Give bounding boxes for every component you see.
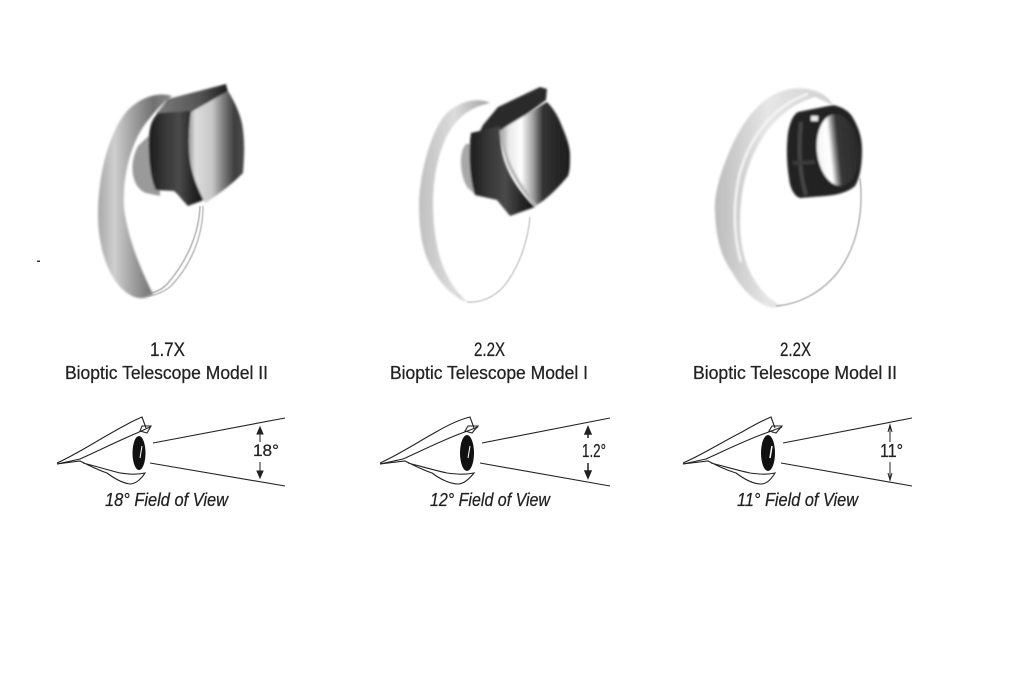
eye diagram: 11 degree field of view: 11° [880, 441, 903, 461]
telescope 3: 2.2X Model II illustration [715, 88, 863, 308]
caption: 1.7X Model II: 1.7X [150, 340, 185, 361]
eye diagram: 12 degree field of view [380, 417, 610, 510]
caption: 2.2X Model I: Bioptic Telescope Model I [390, 363, 588, 383]
stray dot mark [37, 260, 40, 262]
caption: 2.2X Model I: 2.2X [474, 340, 505, 361]
eye diagram: 12 degree field of view: 1.2° [582, 441, 606, 461]
eye diagram: 11 degree field of view [683, 417, 912, 510]
caption: 2.2X Model II [693, 340, 897, 383]
eye diagram: 18 degree field of view [57, 417, 285, 510]
eye diagram: 12 degree field of view: 12° Field of View [430, 490, 551, 510]
caption: 2.2X Model II: 2.2X [780, 340, 811, 361]
eye diagram: 18 degree field of view: 18° Field of View [105, 490, 229, 510]
caption: 1.7X Model II: Bioptic Telescope Model II [65, 363, 268, 383]
caption: 1.7X Model II [65, 340, 268, 383]
telescope 2: 2.2X Model I illustration [419, 87, 570, 302]
eye diagram: 18 degree field of view: 18° [253, 441, 279, 460]
caption: 2.2X Model II: Bioptic Telescope Model II [693, 363, 897, 383]
telescope 1: 1.7X Model II illustration [98, 84, 244, 298]
eye diagram: 11 degree field of view: 11° Field of View [737, 490, 859, 510]
caption: 2.2X Model I [390, 340, 588, 383]
